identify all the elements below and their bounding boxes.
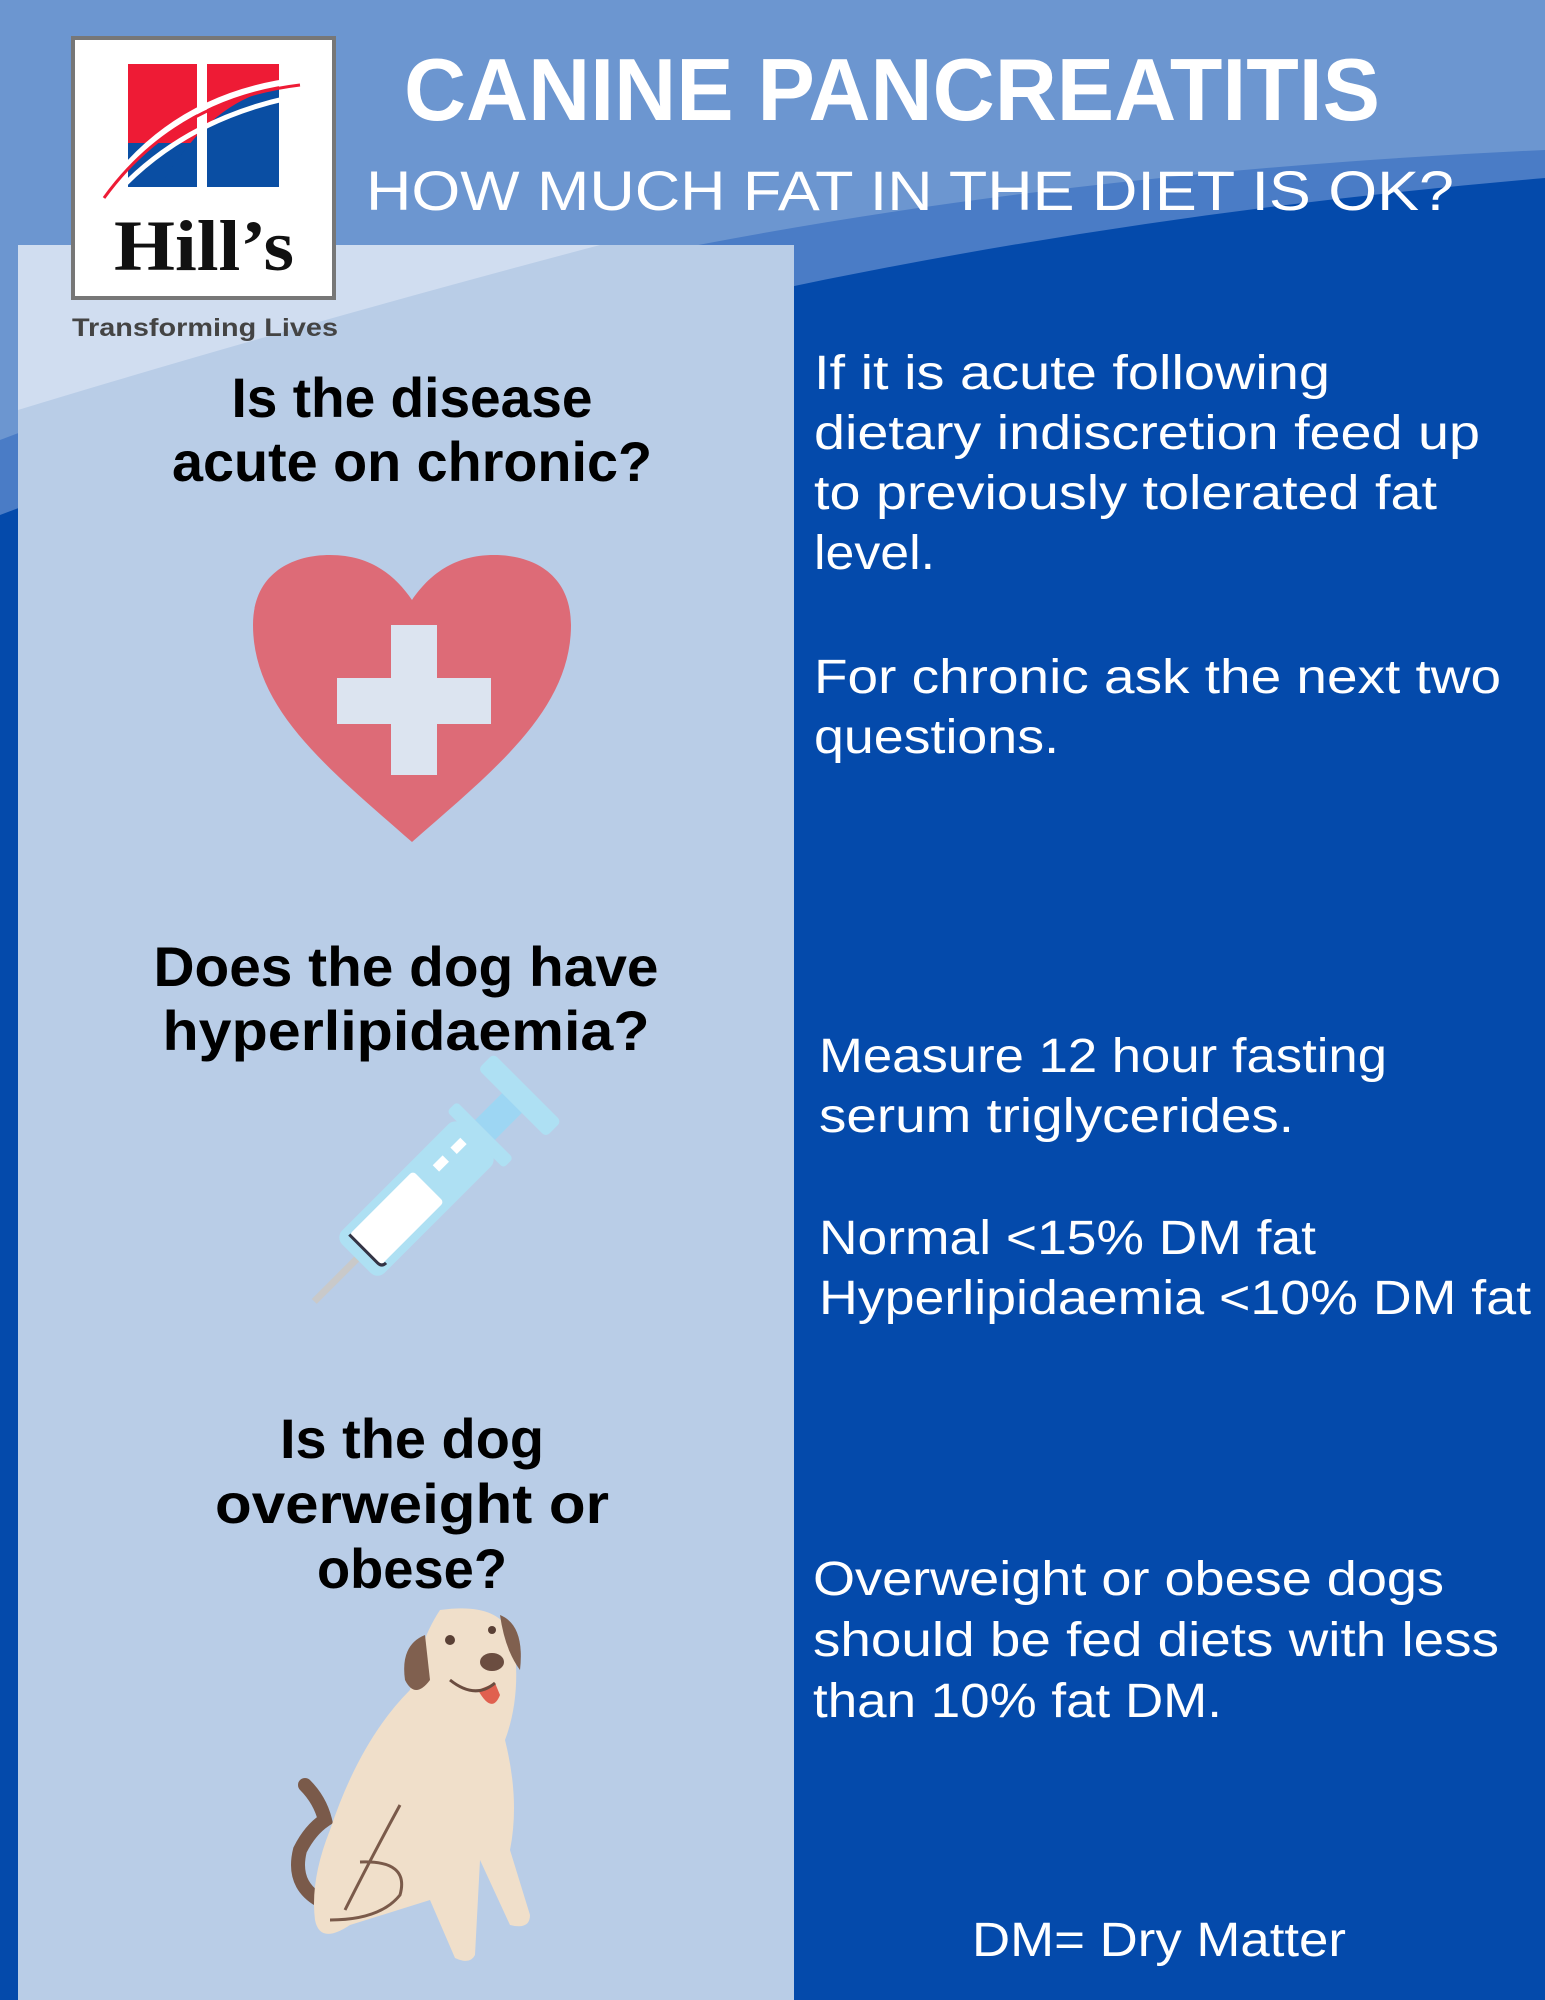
question 3 — [215, 1407, 609, 1600]
text: answer 1: dietary indiscretion feed up — [814, 407, 1480, 460]
text: answer 2 — [819, 1030, 1531, 1325]
footnote: DM= Dry Matter — [972, 1914, 1346, 1967]
question 1: acute on chronic? — [172, 430, 652, 493]
text: answer 3: Overweight or obese dogs — [813, 1553, 1444, 1606]
question 2: hyperlipidaemia? — [162, 999, 650, 1062]
text: answer 2: Hyperlipidaemia <10% DM fat — [819, 1272, 1531, 1325]
question 2: Does the dog have — [154, 935, 658, 998]
question 3: overweight or — [215, 1472, 609, 1535]
text: answer 1: level. — [814, 527, 935, 580]
logo: Hill's — [73, 38, 334, 298]
text: answer 1: questions. — [814, 711, 1059, 764]
question 1 — [172, 366, 652, 493]
text: answer 2: Measure 12 hour fasting — [819, 1030, 1387, 1083]
logo: Hill's: Hill’s — [114, 206, 294, 286]
icon: dog — [298, 1608, 530, 1961]
question 3: Is the dog — [280, 1407, 544, 1470]
text: answer 3: than 10% fat DM. — [813, 1675, 1222, 1728]
text: answer 3 — [813, 1553, 1499, 1728]
text: answer 1: to previously tolerated fat — [814, 467, 1437, 520]
text: answer 1: If it is acute following — [814, 347, 1330, 400]
panel: left questions — [18, 245, 794, 2000]
text: answer 2: serum triglycerides. — [819, 1090, 1294, 1143]
icon: syringe — [280, 1054, 561, 1335]
text: answer 2: Normal <15% DM fat — [819, 1212, 1316, 1265]
subtitle: HOW MUCH FAT IN THE DIET IS OK? — [366, 159, 1454, 222]
question 3: obese? — [317, 1537, 507, 1600]
text: answer 1: For chronic ask the next two — [814, 651, 1501, 704]
text: answer 3: should be fed diets with less — [813, 1614, 1499, 1667]
text: answer 1 — [814, 347, 1501, 764]
question 1: Is the disease — [232, 366, 592, 429]
tagline: Transforming Lives — [72, 314, 338, 342]
icon: heart with cross — [253, 555, 571, 842]
question 2 — [154, 935, 658, 1062]
title: CANINE PANCREATITIS — [404, 40, 1380, 139]
